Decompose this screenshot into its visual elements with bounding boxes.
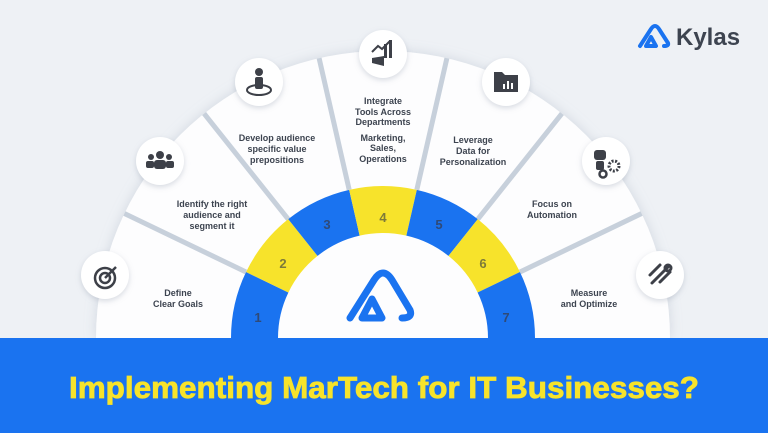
icon: target <box>95 267 116 288</box>
icons <box>81 30 684 299</box>
text 6: Automation <box>527 210 577 220</box>
text 4: Operations <box>359 154 407 164</box>
ring of numbered segments: 1 <box>254 310 262 325</box>
title: Implementing MarTech for IT Businesses? <box>69 370 699 405</box>
text 7: and Optimize <box>561 299 617 309</box>
ring of numbered segments: 7 <box>502 310 510 325</box>
text 4: Sales, <box>370 143 396 153</box>
text 5: Leverage <box>453 135 493 145</box>
logo: Kylas: Kylas <box>676 24 740 51</box>
text 3: Develop audience <box>239 133 315 143</box>
text 2: segment it <box>189 221 235 231</box>
icon: people <box>146 151 174 169</box>
text 4: Departments <box>355 117 411 127</box>
text 4: Marketing, <box>360 133 406 143</box>
logo: Kylas <box>640 24 740 51</box>
center logo <box>350 273 411 318</box>
text 6: Focus on <box>532 199 572 209</box>
ring of numbered segments: 4 <box>379 210 387 225</box>
ring of numbered segments: 3 <box>323 217 331 232</box>
icon: folder chart <box>494 72 518 92</box>
ring of numbered segments <box>231 186 535 338</box>
text 1: Clear Goals <box>153 299 203 309</box>
ring of numbered segments: 2 <box>279 256 287 271</box>
icon: robot gear <box>594 150 619 178</box>
icon: rocket <box>650 265 671 283</box>
text 4: Tools Across <box>355 107 411 117</box>
text 3: prepositions <box>250 155 304 165</box>
text 7: Measure <box>571 288 607 298</box>
bottom banner <box>0 338 768 433</box>
icon: chart megaphone <box>372 40 392 66</box>
step texts <box>153 96 617 309</box>
icon: person on target <box>247 68 271 95</box>
ring of numbered segments: 5 <box>435 217 443 232</box>
text 5: Personalization <box>440 157 506 167</box>
text 3: specific value <box>247 144 307 154</box>
fan panel <box>96 51 670 338</box>
text 2: audience and <box>183 210 241 220</box>
text 5: Data for <box>456 146 490 156</box>
text 1: Define <box>164 288 192 298</box>
ring of numbered segments: 6 <box>479 256 487 271</box>
text 2: Identify the right <box>177 199 247 209</box>
text 4: Integrate <box>364 96 402 106</box>
